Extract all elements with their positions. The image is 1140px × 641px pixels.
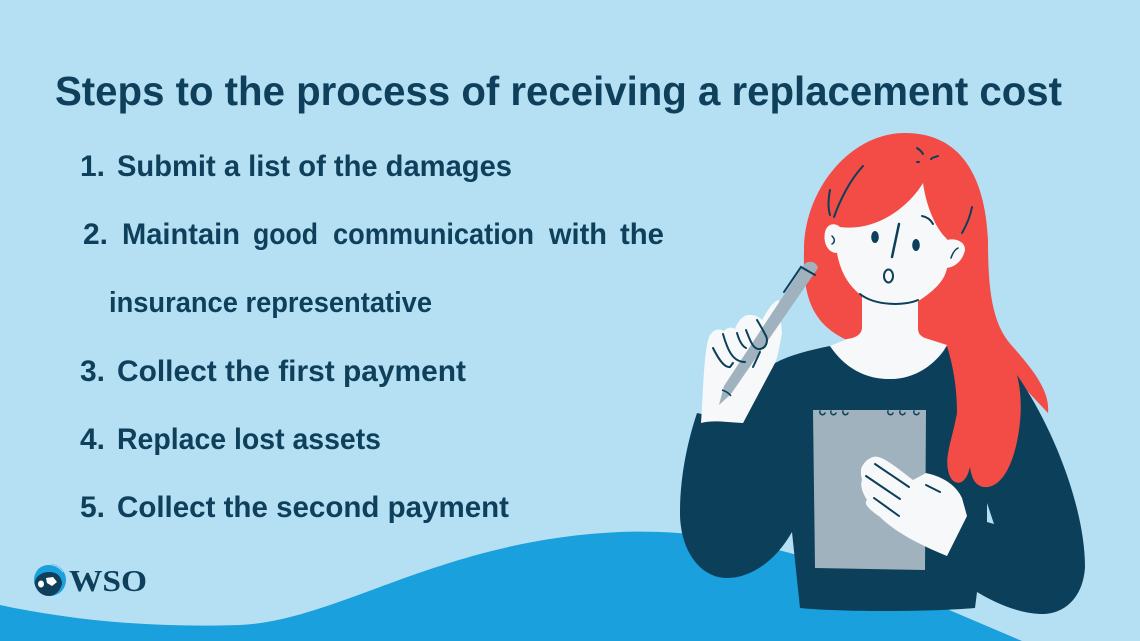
- step 5: 5.: [80, 491, 105, 524]
- notepad: [813, 410, 926, 570]
- step 3: Collect the first payment: [117, 355, 466, 388]
- face: [836, 183, 949, 306]
- step 1: Submit a list of the damages: [117, 150, 512, 183]
- step 2: communication: [333, 218, 534, 251]
- left ear: [824, 224, 842, 253]
- wave: bottom background: [0, 532, 1022, 641]
- hand on notepad: [861, 457, 967, 556]
- step 2: with: [548, 218, 607, 251]
- step 1: 1.: [80, 150, 105, 183]
- step 2: insurance representative: [109, 287, 432, 319]
- step 2: the: [620, 218, 664, 251]
- raised hand: [701, 300, 782, 423]
- pen: [719, 262, 818, 405]
- wordmark: WSO: [69, 563, 147, 598]
- title: Steps to the process of receiving a replacement cost: [55, 68, 1062, 114]
- triangle gap in sweater: [987, 503, 994, 524]
- step 2: Maintain: [122, 218, 240, 251]
- eyes, nose, mouth and face lines: [828, 148, 972, 304]
- back hair: [804, 133, 1048, 413]
- front hair strand: [945, 320, 1021, 487]
- steps list: [80, 150, 664, 524]
- right ear: [945, 239, 965, 268]
- logo: WSO: [34, 563, 147, 598]
- step 2: [83, 218, 664, 319]
- fingers: [713, 320, 767, 367]
- neck and chest: [830, 290, 947, 379]
- sweater: [680, 346, 1085, 614]
- step 4: Replace lost assets: [117, 423, 381, 456]
- step 2: 2.: [83, 218, 108, 251]
- step 5: Collect the second payment: [117, 491, 509, 524]
- step 3: 3.: [80, 355, 105, 388]
- step 2: good: [253, 218, 318, 251]
- illustration: woman with pen and notepad: [680, 133, 1085, 614]
- icon: globe: [34, 564, 66, 596]
- step 4: 4.: [80, 423, 105, 456]
